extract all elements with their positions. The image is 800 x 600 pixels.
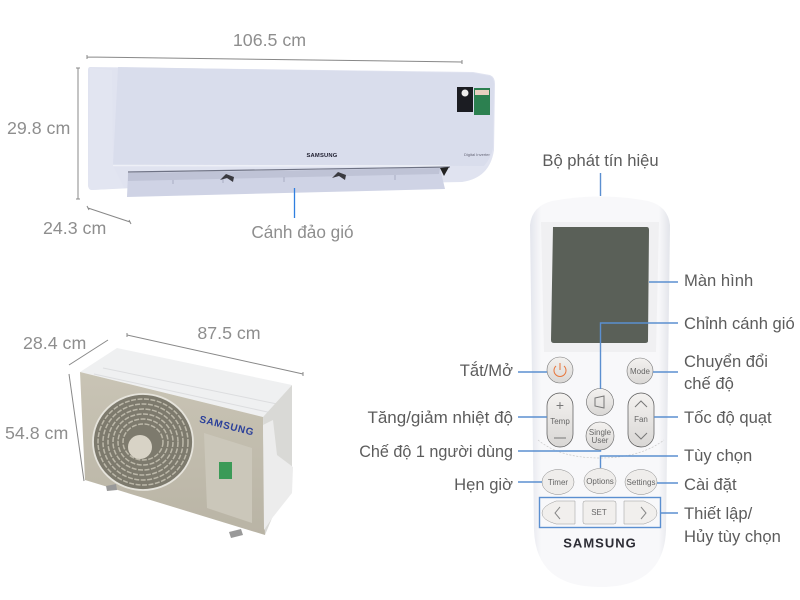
fan button: Fan: [634, 415, 648, 424]
label: timer: Hẹn giờ: [454, 475, 513, 494]
power button: [547, 357, 573, 383]
dimension: height outdoor: [5, 374, 84, 481]
air flap: [127, 167, 449, 197]
temp button: [547, 393, 573, 447]
label: temperature: Tăng/giảm nhiệt độ: [367, 408, 513, 427]
single user button: [586, 422, 614, 450]
mode button: [627, 358, 653, 384]
Samsung logo: SAMSUNG: [306, 153, 338, 159]
label: mode: Chuyển đổi: [684, 352, 768, 371]
label: options: Tùy chọn: [684, 446, 752, 465]
temp button: +: [556, 397, 564, 413]
timer button: Timer: [548, 478, 568, 487]
remote screen: [551, 227, 649, 343]
label: mode: chế độ: [684, 374, 734, 393]
digital inverter mark: Digital Inverter: [464, 152, 490, 157]
energy sticker: [219, 462, 232, 479]
dimension: height outdoor: 54.8 cm: [5, 423, 68, 443]
label: flap adjust: Chỉnh cánh gió: [684, 314, 795, 333]
settings button: [625, 470, 657, 494]
dimension: width indoor: 106.5 cm: [233, 30, 306, 50]
dimension: height indoor: [7, 68, 80, 199]
indoor unit: [88, 67, 495, 197]
feet: [106, 484, 243, 538]
single user button: User: [592, 436, 609, 445]
label: set/cancel: [661, 504, 781, 546]
outdoor unit: [80, 348, 293, 538]
service panel: [204, 433, 252, 523]
single user button: Single: [589, 428, 612, 437]
dimension: width indoor: [87, 30, 462, 64]
remote control: [530, 196, 670, 587]
label: set/cancel: Thiết lập/: [684, 504, 753, 523]
fan grille: [93, 394, 193, 490]
dimension: depth outdoor: [23, 333, 108, 365]
label: signal emitter: [542, 151, 659, 196]
label: power: [460, 361, 547, 380]
navigation buttons: SET: [591, 508, 607, 517]
Samsung logo outdoor: SAMSUNG: [198, 414, 255, 439]
label: timer: [454, 475, 542, 494]
fan button: [628, 393, 654, 447]
timer button: [542, 470, 574, 494]
mode button: Mode: [630, 367, 651, 376]
wind button: [586, 388, 614, 416]
label: air flap: [251, 188, 354, 242]
dimension: depth outdoor: 28.4 cm: [23, 333, 86, 353]
label: options: [600, 446, 752, 468]
options button: [584, 468, 616, 494]
label: screen: [649, 271, 753, 290]
dimension: height indoor: 29.8 cm: [7, 118, 70, 138]
label: power: Tắt/Mở: [460, 361, 513, 380]
label: settings: [657, 475, 737, 494]
energy labels: [457, 87, 490, 115]
label: screen: Màn hình: [684, 271, 753, 290]
navigation buttons: [540, 498, 660, 528]
settings button: Settings: [627, 478, 655, 487]
remote Samsung logo: SAMSUNG: [563, 536, 637, 550]
label: air flap: Cánh đảo gió: [251, 222, 354, 242]
label: signal emitter: Bộ phát tín hiệu: [542, 151, 659, 170]
temp button: Temp: [550, 417, 570, 426]
label: mode: [653, 352, 768, 393]
dimension: width outdoor: [127, 323, 303, 376]
dimension: depth indoor: 24.3 cm: [43, 218, 106, 238]
options button: Options: [586, 477, 614, 486]
label: set/cancel: Hủy tùy chọn: [684, 527, 781, 546]
label: fan speed: Tốc độ quạt: [684, 408, 772, 427]
dimension: depth indoor: [43, 206, 131, 238]
dimension: width outdoor: 87.5 cm: [197, 323, 261, 343]
label: flap adjust: [600, 314, 795, 389]
label: single user: Chế độ 1 người dùng: [359, 443, 513, 461]
label: settings: Cài đặt: [684, 475, 737, 494]
